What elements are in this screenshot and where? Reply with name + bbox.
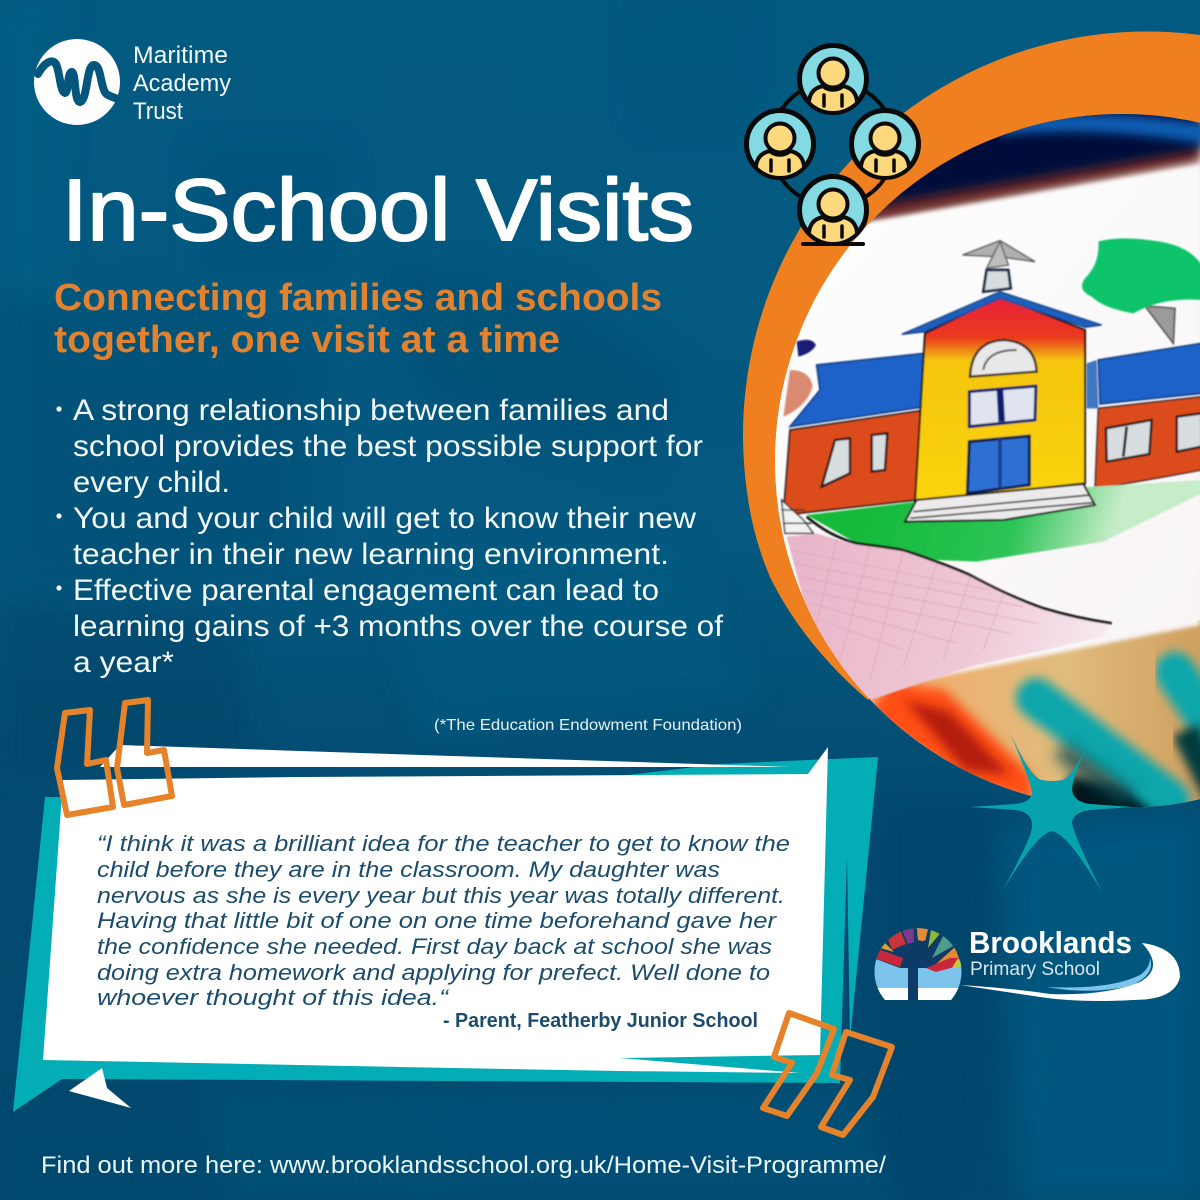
logo tree: [874, 928, 962, 1000]
quote text: the confidence she needed. First day back at school she was: [97, 934, 772, 959]
bullet list: every child.: [73, 466, 230, 499]
quote text: “I think it was a brilliant idea for the teacher to get to know the: [97, 831, 790, 856]
subheading: together, one visit at a time: [54, 319, 560, 361]
icon: connected people network: [746, 46, 918, 246]
bullet list: You and your child will get to know their new: [73, 502, 696, 535]
white top strip: [100, 745, 790, 767]
logo wordmark: Brooklands: [969, 925, 1132, 960]
white note sheet: [43, 747, 828, 1073]
bullet list: [56, 394, 724, 679]
icon: teal sparkle star: [970, 728, 1133, 895]
logo wordmark: Trust: [133, 98, 183, 125]
quote attribution: - Parent, Featherby Junior School: [443, 1010, 758, 1032]
icon: opening quotation marks: [57, 700, 172, 815]
circular photo: child's drawing of a school: [760, 90, 1200, 820]
drawing: wings: [783, 343, 1200, 515]
logo swoosh: [960, 943, 1180, 1001]
logo: Brooklands Primary School: Primary School: [970, 959, 1100, 980]
quote text: nervous as she is every year but this year was totally different.: [97, 883, 785, 908]
drawing: tree: [1082, 238, 1200, 343]
bullet list: learning gains of +3 months over the course of: [73, 610, 724, 643]
bullet list: a year*: [73, 646, 174, 679]
panel: testimonial quote: [13, 745, 878, 1112]
logo wordmark: Academy: [133, 70, 231, 97]
bullet list: Effective parental engagement can lead to: [73, 574, 659, 607]
quote text: Having that little bit of one on one time beforehand gave her: [97, 908, 778, 933]
drawing: grass and path: [782, 480, 1200, 700]
icon: closing quotation marks: [763, 1013, 892, 1135]
quote text: doing extra homework and applying for prefect. Well done to: [97, 960, 770, 985]
subheading: Connecting families and schools: [54, 277, 662, 319]
photo: dark blue pencil band at top: [868, 114, 1200, 225]
quote text: child before they are in the classroom. My daughter was: [97, 857, 720, 882]
quote text: [97, 831, 790, 1010]
white corner triangle: [69, 1068, 131, 1108]
logo wordmark: [133, 42, 231, 125]
photo: paper sheet: [760, 165, 1200, 700]
photo: school building drawing: [782, 238, 1200, 700]
logo: Maritime Academy Trust: [34, 39, 231, 125]
footer link: Find out more here: www.brooklandsschool.org.uk/Home-Visit-Programme/: [41, 1152, 886, 1179]
bullet list: teacher in their new learning environment.: [73, 538, 669, 571]
photo: lower desk area and pencils: [860, 620, 1200, 820]
drawing: central tower: [902, 241, 1102, 522]
bullet list: A strong relationship between families and: [73, 394, 669, 427]
drawing: hand and pencil tip: [783, 340, 816, 417]
subheading: [54, 277, 662, 361]
quote text: whoever thought of this idea.“: [97, 985, 450, 1010]
bullet list: school provides the best possible support for: [73, 430, 703, 463]
logo: Brooklands Primary School: [874, 928, 1180, 1001]
orange arc behind photo: [743, 32, 1200, 700]
teal frame: [13, 757, 878, 1112]
logo wordmark: Maritime: [133, 42, 228, 69]
title: In-School Visits: [62, 162, 694, 259]
footnote: (*The Education Endowment Foundation): [434, 717, 742, 734]
